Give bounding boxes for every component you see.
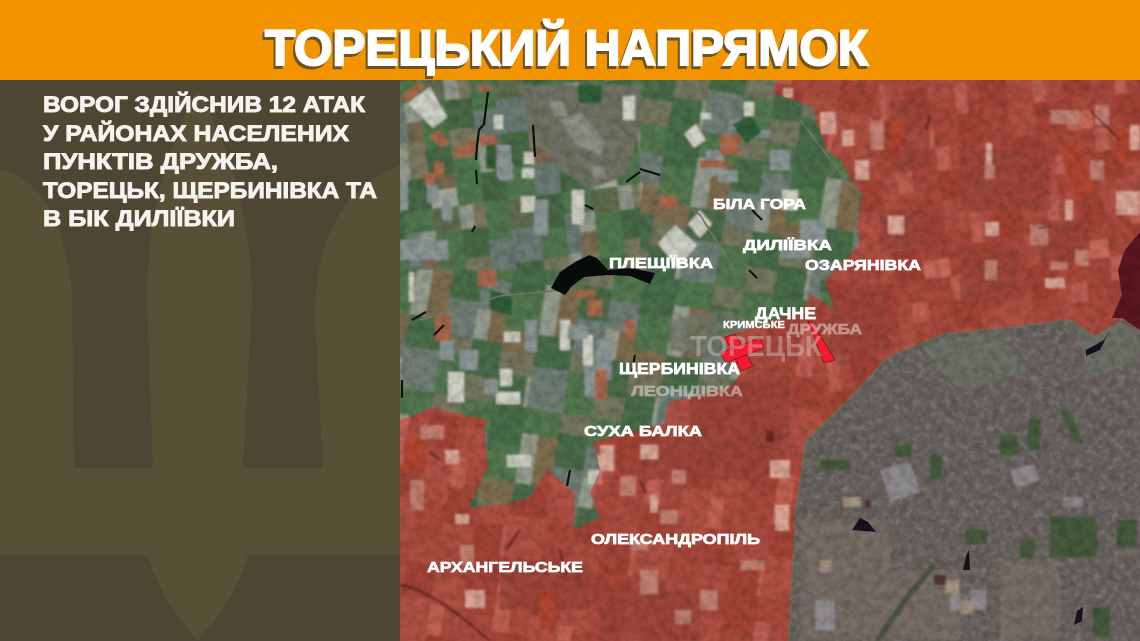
grey settlement [520,85,640,190]
title: ТОРЕЦЬКИЙ НАПРЯМОК [265,19,868,76]
place labels: ДАЧНЕ [755,305,816,323]
Toretsk town area [668,310,758,356]
faint labels: Druzhba, Leonidivka [631,321,862,400]
attack summary text: ПУНКТІВ ДРУЖБА, [43,149,278,174]
place labels: ПЛЕЩІЇВКА [609,255,713,272]
attack summary text: ТОРЕЦЬК, ЩЕРБИНІВКА ТА [43,178,377,203]
attack summary text: В БІК ДИЛІЇВКИ [43,206,235,231]
attack summary text [43,92,377,231]
place labels [427,196,921,576]
faint labels: Druzhba, Leonidivka: ДРУЖБА [787,321,862,338]
attack arrows [720,321,835,371]
place labels: ОЛЕКСАНДРОПІЛЬ [591,531,760,548]
arrow: Druzhba direction [808,321,835,363]
place labels: БІЛА ГОРА [713,196,806,213]
ponds [852,330,1110,625]
attack summary text: ВОРОГ ЗДІЙСНИВ 12 АТАК [43,92,366,117]
title: ТОРЕЦЬКИЙ НАПРЯМОК [263,22,866,79]
panel: text side with trident [0,80,400,641]
place labels: ДИЛІЇВКА [743,237,832,254]
hand-placed bright fields [408,87,798,484]
occupied urban area: grey Horlivka zone [780,320,1140,641]
lake in occupied north-east [1112,232,1140,330]
title bar [0,0,1140,80]
place labels: АРХАНГЕЛЬСЬКЕ [427,559,583,576]
place labels: ЩЕРБИНІВКА [619,361,740,378]
arrow: Kryms'ke direction [725,334,753,371]
arrow: Shcherbynivka direction [720,338,764,363]
trident watermark [0,90,400,641]
attack summary text: У РАЙОНАХ НАСЕЛЕНИХ [43,121,349,146]
rim between red zone and grey zone [789,320,1094,641]
lake: Pleshchiivka reservoir [551,255,655,295]
faint labels: Druzhba, Leonidivka: ЛЕОНІДІВКА [631,383,743,400]
place labels: СУХА БАЛКА [584,423,702,440]
satellite map [395,75,1140,641]
place labels: ОЗАРЯНІВКА [805,257,921,274]
place labels: КРИМСЬКЕ [723,320,785,331]
faint label: Toretsk: ТОРЕЦЬК [690,331,822,363]
map base: field mosaic [395,75,1140,641]
grain texture [400,80,1140,641]
ravines [402,92,762,486]
occupied territory: red overlay [400,80,1140,641]
